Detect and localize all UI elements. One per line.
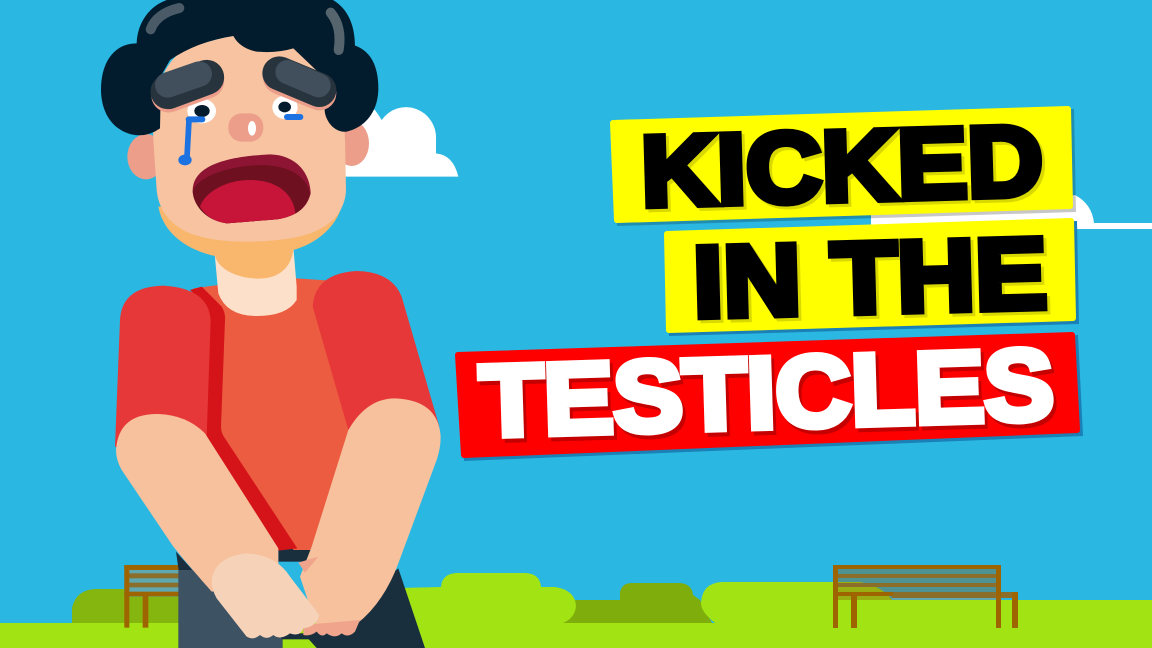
- right arm: [300, 398, 441, 627]
- ears: [127, 121, 369, 179]
- character head: [101, 0, 378, 316]
- mouth: [193, 154, 311, 223]
- cloud behind head: [337, 107, 458, 177]
- bright bush right: [701, 582, 892, 623]
- pants: [176, 548, 425, 648]
- shirt torso: [193, 278, 353, 550]
- right sleeve: [313, 271, 439, 443]
- dark bush left: [72, 589, 185, 623]
- cloud behind title: [871, 195, 1152, 229]
- bench left: [124, 565, 184, 628]
- pink fingers: [298, 557, 360, 636]
- face: [153, 35, 346, 242]
- neck: [214, 247, 297, 316]
- ground: [0, 623, 1152, 648]
- dark bush centre: [555, 583, 712, 623]
- title: [458, 105, 1083, 462]
- hair: [101, 0, 378, 135]
- left sleeve: [115, 286, 211, 457]
- label: TESTICLES: TESTICLES: [481, 333, 1058, 462]
- label: KICKED: KICKED: [642, 108, 1047, 231]
- hair highlights: [151, 8, 340, 50]
- character: [101, 0, 441, 648]
- shirt strap shadow: [190, 287, 297, 551]
- label: IN THE: IN THE: [692, 218, 1048, 339]
- bright bush left: [400, 573, 576, 623]
- chin shadow: [158, 200, 343, 279]
- character body: [115, 271, 441, 648]
- label: TESTICLES: TESTICLES: [478, 329, 1055, 458]
- label: IN THE: IN THE: [695, 221, 1051, 342]
- eyes: [187, 96, 298, 123]
- tears: [181, 117, 300, 163]
- bench right: [833, 565, 1018, 628]
- nose: [228, 113, 263, 142]
- left hand: [212, 553, 319, 638]
- left arm: [116, 414, 278, 592]
- far-right lawn: [885, 600, 1152, 624]
- eyebrows: [168, 72, 319, 95]
- label: KICKED: KICKED: [639, 105, 1044, 228]
